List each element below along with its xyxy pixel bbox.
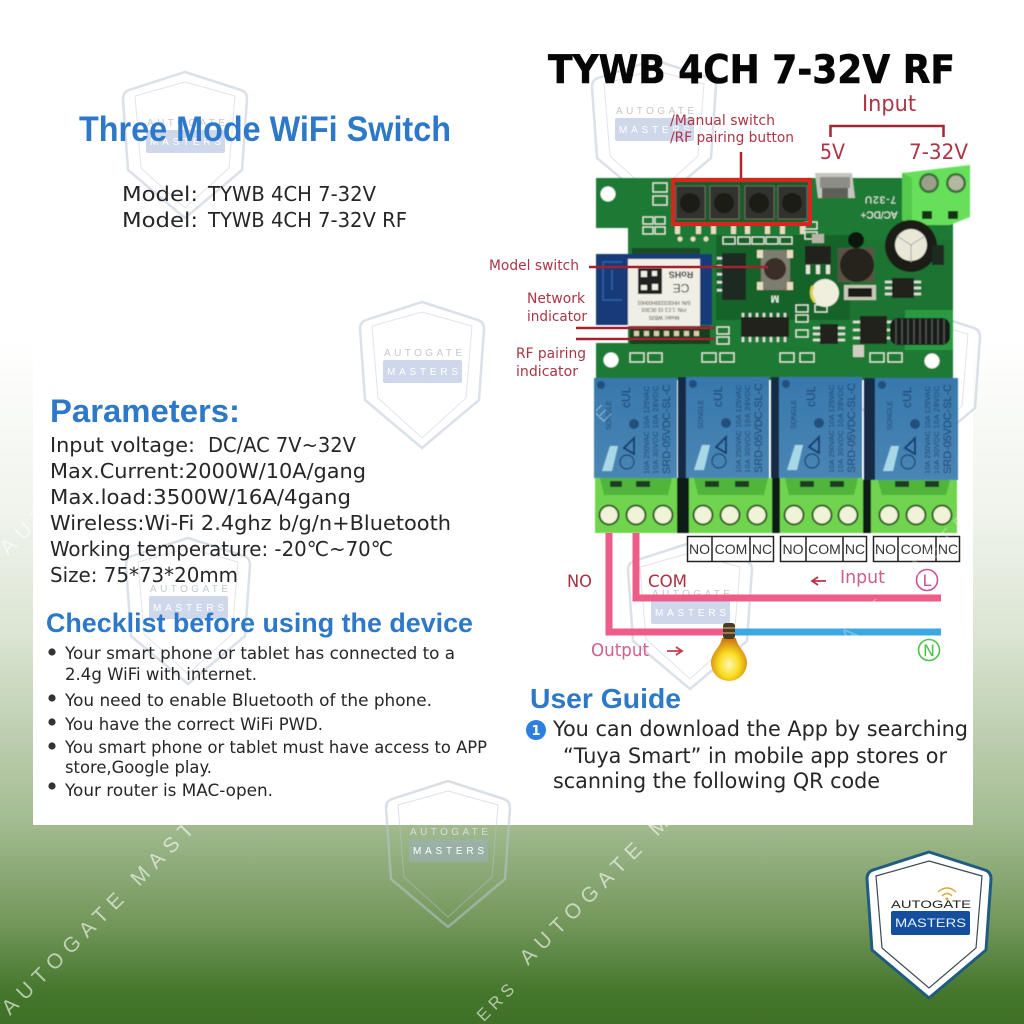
silkscreen labels: [771, 193, 897, 303]
relay screw terminals: [595, 478, 957, 533]
model list: Model:: [122, 182, 198, 206]
terminal labels group 3: NO: [875, 541, 896, 557]
terminal labels group 2: NC: [845, 541, 865, 557]
parameters list: [50, 433, 451, 587]
5V label: 5V: [820, 140, 846, 164]
watermark shield 4: AUTOGATE: [410, 827, 488, 838]
live terminal symbol: L: [923, 571, 932, 590]
watermark shield 5: MASTERS: [619, 125, 690, 136]
model switch label: Model switch: [489, 258, 579, 274]
terminal labels group 2: NO: [782, 541, 804, 557]
screw terminal input: [902, 165, 970, 225]
indicator leader lines: [576, 328, 715, 339]
heading: Parameters: Parameters:: [50, 393, 240, 429]
model switch button: [757, 250, 793, 290]
badge inner outline: [876, 861, 982, 988]
callout line to buttons: [740, 152, 742, 180]
silkscreen labels: M: [771, 292, 779, 303]
heading: Checklist before using the device: Checklist before using the device: [46, 608, 473, 638]
model list: Model:: [122, 208, 198, 232]
watermark shield 7: [856, 310, 980, 456]
relay 2: 10A 250VAC 10A 125VAC: [734, 384, 743, 473]
step 1 text: “Tuya Smart” in mobile app stores or: [563, 744, 947, 769]
relay 4: cUL: [900, 386, 914, 408]
network indicator label: indicator: [527, 309, 587, 325]
terminal labels group 1: NC: [752, 541, 772, 557]
model list: TYWB 4CH 7-32V: [207, 182, 376, 206]
pink COM input wire: [636, 533, 941, 598]
relay 3: SONGLE: [791, 399, 798, 429]
network indicator label: Network: [527, 291, 586, 307]
callouts: [489, 92, 969, 380]
checklist: store,Google play.: [65, 758, 212, 778]
callout: manual switch / RF pairing button: /Manual switch: [670, 113, 775, 129]
checklist: Your router is MAC-open.: [64, 781, 273, 801]
relay 4: SONGLE: [887, 400, 894, 430]
relay 1: SONGLE: [606, 400, 613, 430]
silkscreen labels: 7-32U: [864, 193, 896, 204]
terminal label boxes: [688, 536, 960, 562]
Wi-Fi module: [596, 248, 712, 344]
relay 4: [864, 378, 958, 480]
watermark shield 4: [386, 781, 510, 927]
Wi-Fi module: Model: WB3S: [648, 314, 679, 320]
checklist: Your smart phone or tablet has connected to a: [64, 644, 455, 664]
badge shield: [867, 852, 991, 998]
watermark shield 3: MASTERS: [153, 603, 224, 614]
watermark shield 2: MASTERS: [387, 367, 458, 378]
PCB board: [596, 178, 953, 380]
Wi-Fi module: S/N: HH303339H00H01: [637, 299, 691, 305]
parameters list: Wireless:Wi-Fi 2.4ghz b/g/n+Bluetooth: [50, 511, 451, 535]
tact buttons: [674, 182, 808, 222]
micro USB socket: [815, 173, 855, 198]
callout: manual switch / RF pairing button: /RF pairing button: [670, 130, 794, 146]
light bulb: [711, 623, 747, 681]
relay 2: [678, 377, 769, 478]
brand plate MASTERS: [891, 911, 970, 935]
relay 3: SRD-05VDC-SL-C: [846, 383, 858, 473]
input wire label: Input: [840, 567, 885, 588]
watermark shield 6: MASTERS: [655, 608, 726, 619]
watermark shield 2: [360, 302, 484, 448]
terminal labels group 2: [780, 536, 866, 562]
checklist: You need to enable Bluetooth of the phone.: [64, 691, 432, 711]
step 1 text: You can download the App by searching: [552, 717, 968, 742]
parameters list: Working temperature: -20℃~70℃: [50, 537, 393, 561]
parameters list: Input voltage:: [50, 433, 195, 457]
output arrow: [667, 647, 682, 655]
neutral terminal symbol: [918, 640, 940, 660]
brand name AUTOGATE: AUTOGATE: [891, 899, 971, 911]
brand plate MASTERS: MASTERS: [895, 916, 966, 930]
terminal labels group 3: COM: [901, 541, 933, 557]
checklist: You have the correct WiFi PWD.: [64, 715, 323, 735]
watermark shield 3: AUTOGATE: [150, 584, 228, 595]
white content panel: [33, 0, 973, 825]
diagonal watermark text on background: [0, 423, 895, 1024]
step 1 number icon: 1: [531, 724, 541, 739]
model list: [122, 182, 407, 232]
Wi-Fi module: P/N: 1.C1 01 0C303: [641, 306, 686, 312]
step 1 number icon: [526, 720, 546, 740]
relay 2: SRD-05VDC-SL-C: [753, 383, 765, 473]
watermark shield 1: AUTOGATE: [147, 118, 225, 129]
parameters list: Max.Current:2000W/10A/gang: [50, 459, 366, 483]
red highlight around buttons: [673, 180, 810, 224]
output label: Output: [591, 640, 649, 661]
relay 3: cUL: [804, 385, 818, 407]
faint diagonal watermark over the diagram: [596, 404, 958, 636]
electronics: chips, capacitors, inductor, RF coil: [717, 220, 950, 357]
model switch leader line: [589, 266, 768, 268]
relay 4: 10A 250VAC 10A 125VAC: [923, 385, 932, 474]
model list: TYWB 4CH 7-32V RF: [207, 208, 407, 232]
RF pairing indicator label: [516, 346, 586, 380]
RF pairing indicator label: RF pairing: [516, 346, 586, 362]
faint diagonal watermark over the diagram: AUTOGATE MASTERS AUTOGATE MASTERS: [515, 474, 1011, 970]
RF pairing indicator label: indicator: [516, 364, 578, 380]
step 1 text: scanning the following QR code: [553, 769, 880, 794]
mounting holes: [600, 186, 940, 368]
faint diagonal watermark over the diagram: AUTOGATE MASTERS AUTOGATE MASTERS AUTOGATE: [0, 396, 621, 1020]
diagonal watermark text on background: AUTOGATE MASTERS AUTOGATE: [515, 590, 895, 970]
relay 1: [594, 378, 677, 478]
watermark shield 1: MASTERS: [150, 137, 221, 148]
watermark shield 3: [126, 538, 250, 684]
small component outlines: [630, 183, 902, 362]
checklist: [48, 644, 487, 801]
watermark shield 6: AUTOGATE: [652, 589, 730, 600]
parameters list: Max.load:3500W/16A/4gang: [50, 485, 351, 509]
diagonal watermark text on background: ERS: [473, 976, 522, 1024]
7-32V label: 7-32V: [909, 140, 969, 164]
relay 1: 10A 30VDC 10A 28VDC: [651, 385, 660, 474]
pink NO output wire: [609, 533, 730, 632]
relay 2: cUL: [711, 385, 725, 407]
NO label: NO: [567, 572, 592, 592]
live terminal symbol: [916, 570, 938, 590]
parameters list: DC/AC 7V~32V: [208, 433, 356, 457]
watermark shield 2: AUTOGATE: [384, 348, 462, 359]
relay 2: 10A 30VDC 10A 28VDC: [743, 384, 752, 473]
brand logo badge: [867, 852, 991, 998]
neutral terminal symbol: N: [923, 641, 935, 660]
network indicator label: [527, 291, 587, 325]
terminal labels group 3: [874, 536, 960, 562]
relay 4: SRD-05VDC-SL-C: [942, 384, 954, 474]
checklist: 2.4g WiFi with internet.: [65, 665, 257, 685]
relay 3: [771, 377, 862, 478]
wifi icon: [938, 888, 956, 900]
blue neutral wire: [730, 628, 941, 636]
terminal labels group 1: [688, 536, 774, 562]
terminal labels group 1: COM: [715, 541, 747, 557]
terminal labels group 3: NC: [938, 541, 958, 557]
relay 1: cUL: [619, 386, 633, 408]
watermark shield 4: MASTERS: [413, 846, 484, 857]
terminal labels group 1: NO: [689, 541, 710, 557]
relay 3: 10A 30VDC 10A 28VDC: [836, 384, 845, 473]
watermark shield 6: [628, 543, 752, 689]
diagram: circuit board: [594, 165, 970, 533]
Wi-Fi module: RoHS: [669, 270, 693, 280]
input bracket: [830, 126, 944, 137]
input label: Input: [862, 92, 916, 117]
Wi-Fi module: CE: [673, 281, 689, 295]
heading: User Guide: User Guide: [530, 683, 681, 714]
product title: TYWB 4CH 7-32V RF: [548, 48, 955, 93]
wiring diagram: [567, 533, 941, 681]
relay 3: 10A 250VAC 10A 125VAC: [827, 384, 836, 473]
relay 2: SONGLE: [698, 399, 705, 429]
watermark shield 5: [592, 60, 716, 206]
callout: manual switch / RF pairing button: [670, 113, 794, 146]
watermark shield 1: [123, 72, 247, 218]
parameters list: Size: 75*73*20mm: [50, 563, 238, 587]
watermark shield 5: AUTOGATE: [616, 106, 694, 117]
COM label: COM: [648, 572, 687, 592]
heading: Three Mode WiFi Switch: Three Mode WiFi Switch: [79, 110, 451, 149]
silkscreen labels: AC/DC+: [860, 208, 897, 219]
step 1 text: [552, 717, 968, 794]
checklist: You smart phone or tablet must have access to APP: [64, 738, 487, 758]
terminal labels group 2: COM: [808, 541, 841, 557]
relay 4: 10A 30VDC 10A 28VDC: [932, 385, 941, 474]
input arrow: [812, 577, 826, 585]
diagonal watermark text on background: AUTOGATE MASTERS: [0, 768, 249, 1020]
relay 1: SRD-05VDC-SL-C: [661, 384, 673, 474]
relay 1: 10A 250VAC 10A 125VAC: [642, 385, 651, 474]
